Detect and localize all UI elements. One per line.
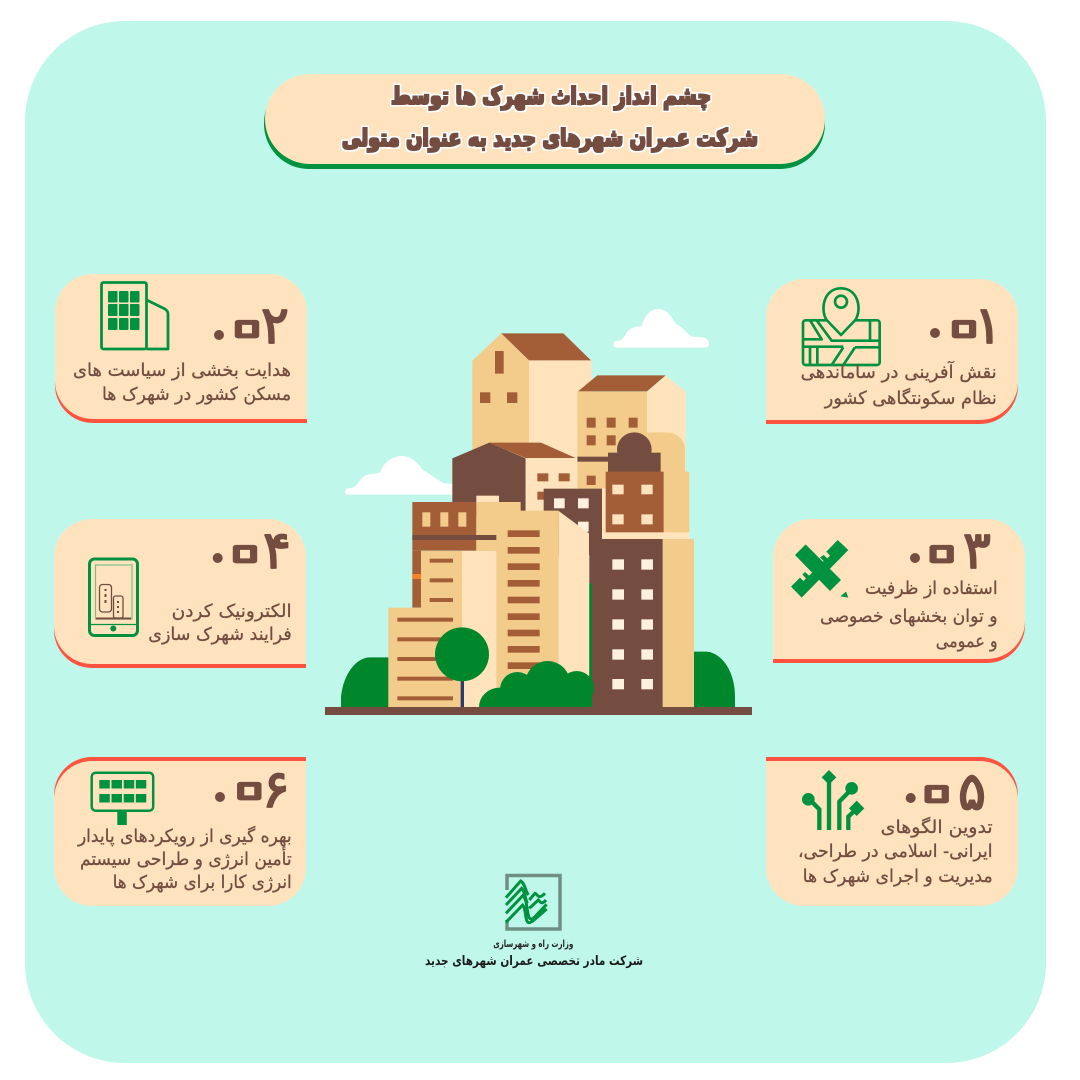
logo [425,876,643,969]
number 05 [894,723,986,851]
icon: phone [90,559,138,636]
number 04: ۰ [202,483,288,611]
text 06 [77,825,292,893]
card 02 [55,258,307,423]
text 05: مدیریت و اجرای شهرک ها [803,866,993,887]
card 05 [766,723,1018,906]
number 04: ۴ [263,521,291,581]
icon: solar panel [92,773,153,825]
number 03: ۰ [899,483,985,611]
text 03: استفاده از ظرفیت [865,578,998,599]
logo frame [507,876,560,929]
title banner: شرکت عمران شهرهای جدید به عنوان متولی [342,124,758,152]
dark tower with windows [544,489,694,707]
title banner [264,74,825,169]
icon: circuit [802,770,864,830]
company name: شرکت مادر تخصصی عمران شهرهای جدید [425,954,643,969]
text 02: مسکن کشور در شهرک ها [102,384,291,405]
text 02: هدایت بخشی از سیاست های [73,360,291,381]
title banner: چشم انداز احداث شهرک ها توسط [391,82,711,110]
number 02: ۲ [261,296,289,356]
text 06: انرژی کارا برای شهرک ها [113,872,292,893]
number 06: ۰ [206,720,292,848]
number 01: ۱ [974,296,1002,356]
text 03: و عمومی [936,631,998,652]
card 06 [54,720,306,906]
number 06 [206,720,292,848]
card 01 [766,258,1018,424]
card 04 [54,483,306,668]
number 01 [921,258,1007,386]
text 01: نقش آفرینی در ساماندهی [801,360,997,383]
text 01: نظام سکونتگاهی کشور [824,387,997,409]
number 03 [899,483,991,611]
ministry name: وزارت راه و شهرسازی [493,939,573,950]
dome [608,432,661,472]
middle brown house [452,443,577,517]
central city illustration [325,309,752,715]
icon: building [102,282,168,349]
cloud right [613,309,709,348]
card 03 [773,483,1025,663]
number 04 [202,483,291,611]
text 03 [820,578,998,652]
text 04: الکترونیک کردن [172,601,292,622]
number 02: ۰ [204,258,290,386]
text 05 [798,816,993,887]
bush [479,661,594,707]
hedges [341,652,735,707]
second building [577,375,686,492]
logo waves [506,881,547,923]
text 05: ایرانی- اسلامی در طراحی، [798,841,993,862]
number 01: ۰ [921,258,1007,386]
icon: map pin [803,288,880,365]
text 03: و توان بخشهای خصوصی [820,606,998,627]
number 03: ۳ [963,521,991,581]
text 04 [148,601,292,645]
icon: ruler and pencil [791,540,848,598]
text 06: تأمین انرژی و طراحی سیستم [80,846,292,870]
text 05: تدوین الگوهای [881,816,993,838]
cloud left [345,456,453,495]
text 01 [801,360,997,409]
tan striped tower [412,496,589,707]
number 05: ۰ [894,723,980,851]
tree [435,627,489,707]
text 02 [73,360,291,405]
ground [325,707,752,715]
small front building [388,551,496,707]
tall building [472,333,592,460]
text 04: فرایند شهرک سازی [148,624,292,645]
number 06: ۶ [262,760,290,820]
number 02 [204,258,290,386]
number 05: ۵ [958,762,986,822]
orange-brown tower [602,472,689,539]
left orange-brown block [412,502,476,608]
text 06: بهره گیری از رویکردهای پایدار [77,825,292,847]
